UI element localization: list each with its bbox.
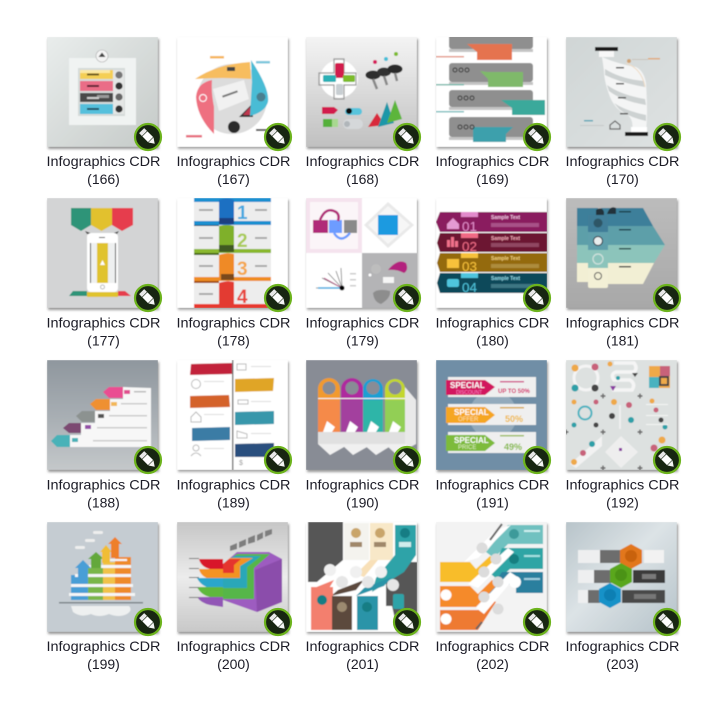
- thumbnail 179: [306, 198, 417, 308]
- caption 199: (199): [87, 656, 120, 672]
- thumbnail 192: [564, 360, 677, 470]
- badge: CorelDRAW pen: [523, 446, 551, 474]
- tile: Infographics CDR (170): [566, 37, 681, 187]
- caption 167: Infographics CDR: [176, 153, 291, 169]
- badge: CorelDRAW pen: [264, 446, 292, 474]
- thumbnail 170: [566, 37, 677, 147]
- caption 177: Infographics CDR: [46, 314, 161, 330]
- caption 188: (188): [87, 495, 120, 511]
- shadow: [437, 524, 548, 634]
- tile: Infographics CDR (169): [436, 34, 551, 187]
- caption 191: Infographics CDR: [436, 476, 550, 492]
- shadow: [48, 362, 159, 472]
- shadow: [567, 39, 678, 149]
- badge: CorelDRAW pen: [653, 284, 681, 312]
- tile: Infographics CDR (181): [566, 198, 681, 349]
- badge: CorelDRAW pen: [134, 123, 162, 151]
- thumbnail 200: [177, 522, 288, 632]
- badge: CorelDRAW pen: [523, 123, 551, 151]
- badge: CorelDRAW pen: [134, 284, 162, 312]
- shadow: [178, 524, 289, 634]
- caption 189: (189): [217, 495, 250, 511]
- caption 189: [176, 476, 290, 511]
- caption 192: [566, 476, 680, 511]
- thumbnail 191: SPECIAL: [450, 381, 485, 390]
- caption 199: Infographics CDR: [46, 638, 161, 654]
- caption 190: (190): [346, 495, 379, 511]
- caption 201: [306, 638, 420, 672]
- thumbnail 191: 49%: [504, 442, 522, 452]
- tile: Infographics CDR (166): [46, 37, 162, 187]
- caption 170: Infographics CDR: [566, 153, 680, 169]
- thumbnail 180: 04: [462, 280, 477, 295]
- caption 167: (167): [217, 171, 250, 187]
- caption 177: [46, 314, 160, 349]
- thumbnail 191: [436, 360, 547, 470]
- thumbnail 177: [47, 198, 158, 308]
- tile: Infographics CDR (190): [306, 360, 421, 511]
- thumbnail 178: 4: [237, 287, 248, 308]
- shadow: [48, 524, 159, 634]
- thumbnail 191: 50%: [505, 414, 523, 424]
- caption 201: Infographics CDR: [306, 638, 420, 654]
- caption 167: [176, 153, 290, 187]
- caption 179: (179): [346, 333, 379, 349]
- shadow: [307, 200, 418, 310]
- thumbnail 201: [306, 522, 417, 632]
- caption 181: [566, 314, 680, 349]
- thumbnail 180: 01: [462, 219, 477, 234]
- caption 202: [436, 638, 550, 672]
- shadow: [178, 362, 289, 472]
- caption 203: Infographics CDR: [566, 638, 680, 654]
- caption 202: Infographics CDR: [436, 638, 550, 654]
- thumbnail 191: SPECIAL: [454, 436, 489, 445]
- shadow: [437, 362, 548, 472]
- tile: Infographics CDR (192): [564, 360, 681, 511]
- caption 178: [176, 314, 290, 349]
- tile: Infographics CDR (200): [176, 522, 292, 672]
- tile: Infographics CDR (202): [436, 522, 551, 672]
- caption 191: (191): [476, 495, 509, 511]
- thumbnail 180: Sample Text: [491, 236, 520, 242]
- thumbnail 203: [566, 522, 677, 632]
- caption 203: (203): [606, 656, 639, 672]
- thumbnail 166: [47, 37, 158, 147]
- shadow: [178, 200, 289, 310]
- badge: CorelDRAW pen: [134, 608, 162, 636]
- caption 179: Infographics CDR: [306, 314, 420, 330]
- caption 180: Infographics CDR: [436, 314, 550, 330]
- shadow: [567, 200, 678, 310]
- tile: Infographics CDR (168): [306, 37, 421, 187]
- caption 203: [566, 638, 680, 672]
- badge: CorelDRAW pen: [134, 446, 162, 474]
- caption 189: Infographics CDR: [176, 476, 291, 492]
- tile: Infographics CDR (189): [176, 360, 292, 511]
- caption 192: (192): [606, 495, 639, 511]
- badge: CorelDRAW pen: [523, 608, 551, 636]
- thumbnail 180: 02: [462, 239, 477, 254]
- badge: CorelDRAW pen: [393, 446, 421, 474]
- caption 170: [566, 153, 680, 187]
- caption 178: (178): [217, 333, 250, 349]
- badge: CorelDRAW pen: [393, 284, 421, 312]
- tile: Infographics CDR (179): [306, 198, 421, 349]
- caption 181: (181): [606, 333, 639, 349]
- caption 178: Infographics CDR: [176, 314, 291, 330]
- badge: CorelDRAW pen: [523, 284, 551, 312]
- tile: Infographics CDR (201): [306, 522, 421, 672]
- thumbnail 180: Sample Text: [491, 276, 520, 282]
- badge: CorelDRAW pen: [393, 123, 421, 151]
- thumbnail 178: [177, 198, 288, 308]
- thumbnail 178: 3: [237, 259, 248, 280]
- caption 168: Infographics CDR: [306, 153, 420, 169]
- tile: Infographics CDR (191): [436, 360, 551, 511]
- badge: CorelDRAW pen: [264, 123, 292, 151]
- caption 190: [306, 476, 420, 511]
- caption 201: (201): [346, 656, 379, 672]
- caption 200: [176, 638, 290, 672]
- thumbnail 189: $: [239, 460, 243, 467]
- caption 192: Infographics CDR: [566, 476, 680, 492]
- thumbnail 188: [47, 360, 158, 470]
- caption 191: [436, 476, 550, 511]
- tile: Infographics CDR (177): [46, 198, 162, 349]
- tile: Infographics CDR (199): [46, 522, 162, 672]
- badge: CorelDRAW pen: [653, 123, 681, 151]
- thumbnail 178: 2: [237, 231, 248, 252]
- thumbnail 178: 1: [237, 203, 248, 224]
- thumbnail 180: 03: [462, 259, 477, 274]
- shadow: [48, 39, 159, 149]
- shadow: [178, 39, 289, 149]
- caption 177: (177): [87, 333, 120, 349]
- caption 179: [306, 314, 420, 349]
- caption 190: Infographics CDR: [306, 476, 420, 492]
- thumbnail 191: SPECIAL: [454, 408, 489, 417]
- thumbnail 191: DISCOUNT: [456, 390, 482, 396]
- caption 166: Infographics CDR: [46, 153, 161, 169]
- thumbnail 202: [436, 522, 547, 632]
- shadow: [307, 39, 418, 149]
- caption 168: (168): [346, 171, 379, 187]
- badge: CorelDRAW pen: [653, 608, 681, 636]
- caption 169: Infographics CDR: [436, 153, 550, 169]
- caption 202: (202): [476, 656, 509, 672]
- caption 168: [306, 153, 420, 187]
- thumbnail 169: [436, 34, 547, 147]
- shadow: [567, 524, 678, 634]
- thumbnail 180: Sample Text: [491, 256, 520, 262]
- caption 188: [46, 476, 160, 511]
- shadow: [307, 362, 418, 472]
- shadow: [567, 362, 678, 472]
- caption 200: (200): [217, 656, 250, 672]
- caption 200: Infographics CDR: [176, 638, 291, 654]
- thumbnail 190: [306, 360, 417, 470]
- shadow: [48, 200, 159, 310]
- badge: CorelDRAW pen: [393, 608, 421, 636]
- thumbnail 180: Sample Text: [491, 215, 520, 221]
- shadow: [437, 39, 548, 149]
- badge: CorelDRAW pen: [264, 284, 292, 312]
- badge: CorelDRAW pen: [653, 446, 681, 474]
- caption 188: Infographics CDR: [46, 476, 161, 492]
- badge: CorelDRAW pen: [264, 608, 292, 636]
- thumbnail 180: [436, 198, 547, 308]
- thumbnail 191: OFFER: [458, 417, 479, 423]
- tile: Infographics CDR (180): [436, 198, 551, 349]
- caption 166: [46, 153, 160, 187]
- caption 169: (169): [476, 171, 509, 187]
- tile: Infographics CDR (203): [566, 522, 681, 672]
- thumbnail 191: UP TO 50%: [498, 389, 530, 395]
- caption 180: [436, 314, 550, 349]
- caption 166: (166): [87, 171, 120, 187]
- thumbnail 191: PRICE: [458, 445, 476, 451]
- thumbnail 181: [566, 198, 677, 308]
- caption 170: (170): [606, 171, 639, 187]
- tile: Infographics CDR (188): [46, 360, 162, 511]
- caption 181: Infographics CDR: [566, 314, 680, 330]
- thumbnail 167: [177, 37, 288, 147]
- thumbnail 168: [306, 37, 417, 147]
- tile: Infographics CDR (178): [176, 198, 292, 349]
- thumbnail 189: [177, 360, 288, 470]
- caption 199: [46, 638, 160, 672]
- tile: Infographics CDR (167): [176, 37, 292, 187]
- shadow: [437, 200, 548, 310]
- thumbnail 199: [47, 522, 158, 632]
- caption 169: [436, 153, 550, 187]
- shadow: [307, 524, 418, 634]
- caption 180: (180): [476, 333, 509, 349]
